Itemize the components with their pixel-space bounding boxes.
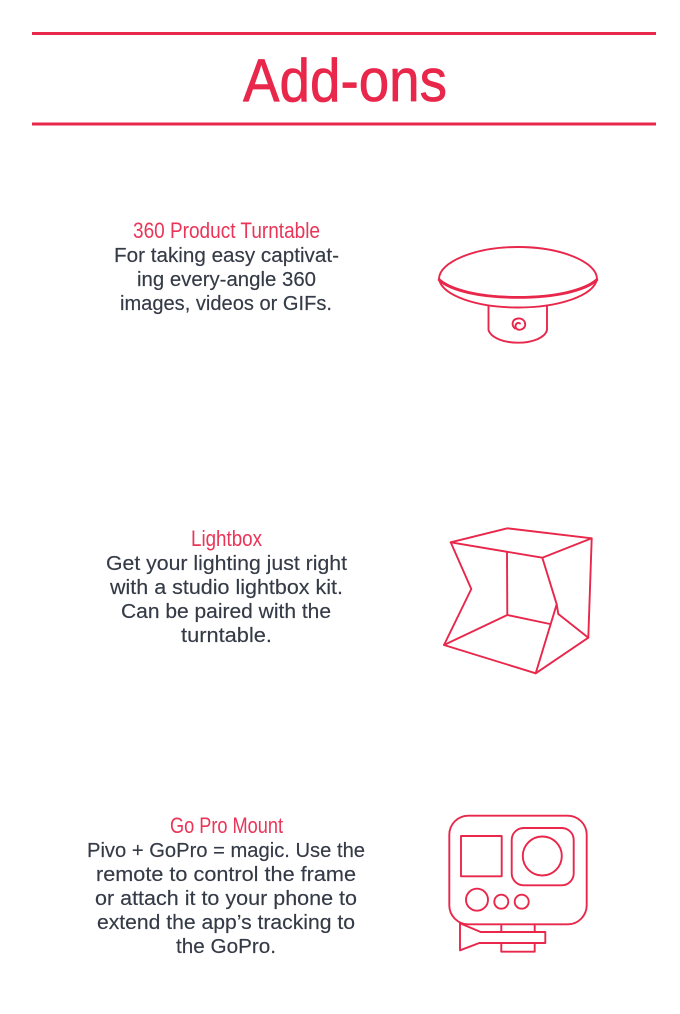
text block: go pro description: remote to control the frame xyxy=(96,863,356,886)
text block: turntable description: images, videos or GIFs. xyxy=(120,292,332,315)
icon: turntable xyxy=(439,247,597,343)
heading: lightbox: Lightbox xyxy=(191,526,262,551)
text block: go pro description: or attach it to your phone to xyxy=(95,887,357,910)
text block: go pro description: the GoPro. xyxy=(176,935,276,958)
heading: turntable: 360 Product Turntable xyxy=(133,218,320,243)
text block: turntable description: ing every-angle 360 xyxy=(137,268,316,291)
text block: turntable description xyxy=(114,244,339,315)
title block: Add-ons xyxy=(243,47,447,114)
text block: lightbox description: with a studio lightbox kit. xyxy=(109,576,343,599)
text block: go pro description: Pivo + GoPro = magic. Use the xyxy=(87,839,365,862)
text block: lightbox description xyxy=(106,552,347,647)
panel: go pro mount xyxy=(87,813,587,958)
text block: lightbox description: Get your lighting just right xyxy=(106,552,347,575)
text block: lightbox description: Can be paired with the xyxy=(121,600,331,623)
panel: lightbox xyxy=(106,526,592,673)
icon: lightbox xyxy=(444,528,592,673)
icon: gopro camera xyxy=(449,816,587,952)
heading: go pro mount: Go Pro Mount xyxy=(170,813,283,838)
text block: go pro description: extend the app’s tracking to xyxy=(97,911,355,934)
text block: turntable description: For taking easy captivat- xyxy=(114,244,339,267)
text block: go pro description xyxy=(87,839,365,958)
panel: 360 product turntable xyxy=(114,218,597,343)
text block: lightbox description: turntable. xyxy=(181,624,272,647)
